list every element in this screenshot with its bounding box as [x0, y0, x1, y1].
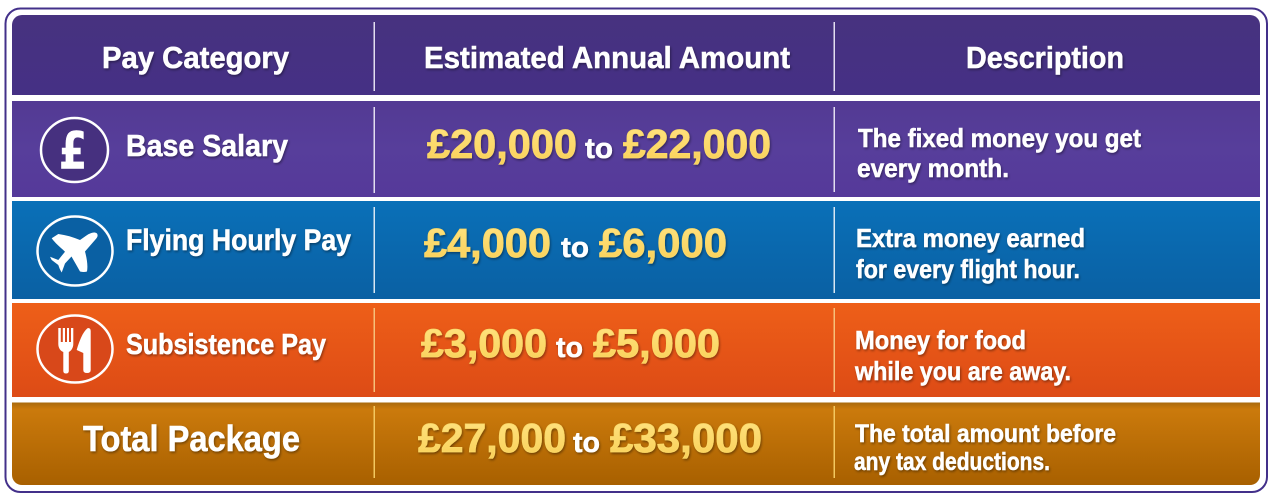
- description: base salary: The fixed money you get: [858, 123, 1141, 153]
- header row: [12, 15, 1260, 95]
- amount: total package: to: [573, 427, 600, 459]
- label: subsistence pay: Subsistence Pay: [126, 329, 326, 361]
- description: subsistence pay: [854, 325, 1071, 386]
- row: flying hourly pay: [12, 201, 1260, 299]
- amount: base salary: £20,000: [427, 121, 577, 167]
- row: total package: [12, 402, 1260, 485]
- amount: flying hourly pay: £6,000: [599, 220, 727, 266]
- description: subsistence pay: Money for food: [855, 325, 1026, 355]
- label: base salary: Base Salary: [126, 128, 289, 163]
- amount: subsistence pay: £3,000: [421, 322, 547, 366]
- amount: subsistence pay: £5,000: [593, 322, 720, 366]
- description: base salary: every month.: [857, 153, 1009, 183]
- heading: pay category: Pay Category: [102, 40, 290, 75]
- description: subsistence pay: while you are away.: [854, 356, 1071, 386]
- description: base salary: [857, 123, 1141, 183]
- amount: total package: £27,000: [418, 415, 566, 461]
- description: total package: [854, 420, 1116, 476]
- amount: total package: [418, 415, 762, 461]
- amount: flying hourly pay: to: [561, 232, 589, 264]
- icon: airplane: [38, 216, 112, 286]
- icon: fork and knife: [38, 316, 112, 382]
- row background: [12, 303, 1260, 397]
- row background: [12, 402, 1260, 485]
- description: flying hourly pay: for every flight hour.: [856, 254, 1080, 284]
- amount: base salary: £22,000: [623, 121, 771, 167]
- label: flying hourly pay: Flying Hourly Pay: [126, 224, 351, 257]
- amount: subsistence pay: to: [556, 332, 583, 364]
- icon: pound coin: £: [59, 122, 87, 182]
- icon: pound coin: [41, 118, 108, 182]
- amount: flying hourly pay: £4,000: [424, 220, 551, 266]
- amount: subsistence pay: [421, 322, 720, 366]
- description: flying hourly pay: [856, 223, 1085, 284]
- label: total package: Total Package: [83, 418, 300, 459]
- amount: base salary: [427, 121, 771, 167]
- row: subsistence pay: [12, 303, 1260, 397]
- heading: description: Description: [966, 40, 1124, 75]
- description: flying hourly pay: Extra money earned: [856, 223, 1085, 253]
- amount: flying hourly pay: [424, 220, 727, 266]
- row background: [12, 101, 1260, 197]
- header background: [12, 15, 1260, 95]
- heading: estimated annual amount: Estimated Annual Amount: [424, 40, 790, 75]
- row: base salary: [12, 101, 1260, 197]
- amount: total package: £33,000: [610, 415, 762, 461]
- description: total package: The total amount before: [855, 420, 1116, 448]
- amount: base salary: to: [585, 133, 613, 165]
- description: total package: any tax deductions.: [854, 448, 1050, 476]
- row background: [12, 201, 1260, 299]
